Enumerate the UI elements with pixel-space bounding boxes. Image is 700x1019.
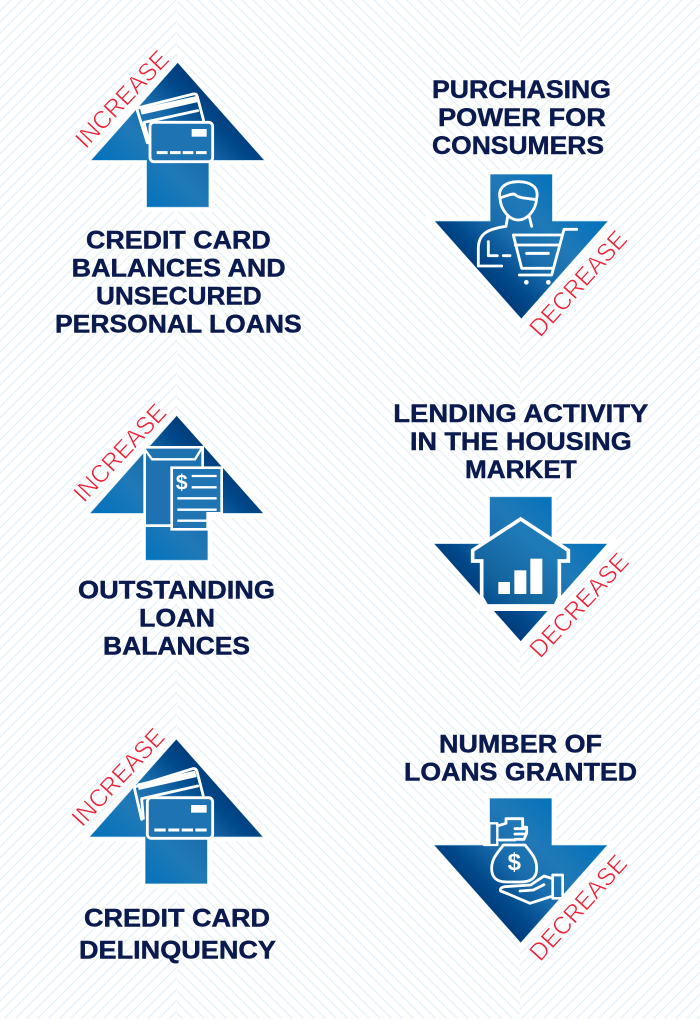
panel: purchasing power [432, 77, 633, 342]
panel: number of loans granted [404, 732, 637, 967]
heading [432, 77, 611, 160]
label: decrease: DECREASE [524, 548, 635, 663]
panel: credit card balances [55, 45, 302, 338]
icon: money bag between hands: $ [508, 849, 521, 876]
heading: CREDIT CARD [86, 228, 271, 254]
icon: money bag between hands [484, 819, 563, 903]
heading: LOANS GRANTED [404, 760, 637, 786]
heading: UNSECURED [96, 284, 262, 310]
heading: CREDIT CARD [84, 906, 270, 932]
icon: house with bar chart [473, 519, 568, 611]
icon: credit cards [137, 94, 213, 162]
heading: OUTSTANDING [78, 578, 275, 604]
heading: MARKET [465, 457, 577, 484]
label: increase: INCREASE [68, 399, 172, 508]
arrow: up [90, 739, 263, 884]
icon: credit cards [135, 769, 213, 838]
heading: POWER FOR [438, 105, 606, 132]
heading [78, 578, 275, 660]
icon: envelope and invoice: $ [176, 470, 188, 494]
label: decrease: DECREASE [524, 225, 633, 342]
heading [79, 906, 276, 964]
label: decrease: DECREASE [524, 850, 633, 967]
heading: LENDING ACTIVITY [393, 401, 648, 428]
label: increase: INCREASE [66, 723, 171, 832]
arrow: up [90, 416, 263, 560]
arrow: up [91, 63, 264, 207]
heading: DELINQUENCY [79, 938, 276, 964]
icon: shopper with cart [478, 182, 577, 285]
heading [404, 732, 637, 786]
heading [55, 228, 302, 338]
panel: credit card delinquency [66, 723, 276, 964]
panel: outstanding loan balances [68, 399, 275, 660]
arrow: down [434, 497, 607, 641]
icon: envelope and invoice [145, 447, 222, 529]
heading: BALANCES AND [72, 256, 286, 282]
heading: BALANCES [103, 634, 250, 660]
panel: housing market [393, 401, 648, 663]
heading: CONSUMERS [432, 133, 604, 160]
heading: NUMBER OF [439, 732, 602, 758]
heading: PURCHASING [432, 77, 611, 104]
arrow: down [435, 174, 608, 319]
heading: LOAN [139, 606, 215, 632]
heading: PERSONAL LOANS [55, 312, 302, 338]
heading: IN THE HOUSING [410, 429, 632, 456]
label: increase: INCREASE [70, 45, 175, 154]
heading [393, 401, 648, 484]
arrow: down [434, 798, 607, 943]
